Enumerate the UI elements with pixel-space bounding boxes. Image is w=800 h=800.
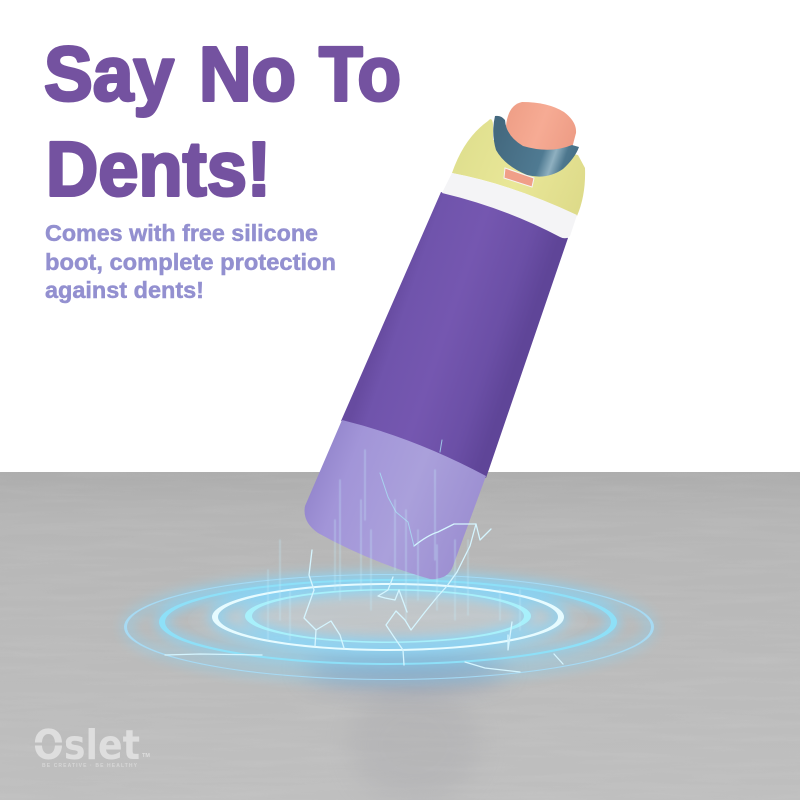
- peach clasp: [504, 168, 534, 187]
- concrete floor: [0, 472, 800, 800]
- subtitle: [45, 220, 336, 303]
- Oslet logo: TM: [142, 753, 150, 759]
- peach button: [506, 102, 576, 152]
- Oslet logo: Oslet: [33, 721, 140, 769]
- title: To: [319, 32, 401, 118]
- lightning arcs: [165, 440, 563, 672]
- subtitle: against dents!: [45, 277, 204, 303]
- white collar: [442, 173, 577, 238]
- background wall: [0, 0, 800, 472]
- vertical energy streaks: [268, 450, 520, 640]
- title: Say: [44, 32, 174, 118]
- silicone boot: [305, 420, 486, 579]
- title: No: [199, 32, 296, 118]
- subtitle: Comes with free silicone: [45, 220, 318, 246]
- cap: [442, 102, 585, 238]
- blue band: [493, 116, 579, 177]
- impact shadow: [305, 650, 505, 686]
- yellow lid: [452, 119, 585, 216]
- impact rings: [124, 574, 654, 680]
- water bottle: [305, 102, 585, 579]
- title: [44, 32, 401, 212]
- title: Dents!: [46, 126, 271, 212]
- Oslet logo: BE CREATIVE · BE HEALTHY: [42, 763, 138, 769]
- bottle body: [341, 192, 568, 478]
- subtitle: boot, complete protection: [45, 249, 336, 275]
